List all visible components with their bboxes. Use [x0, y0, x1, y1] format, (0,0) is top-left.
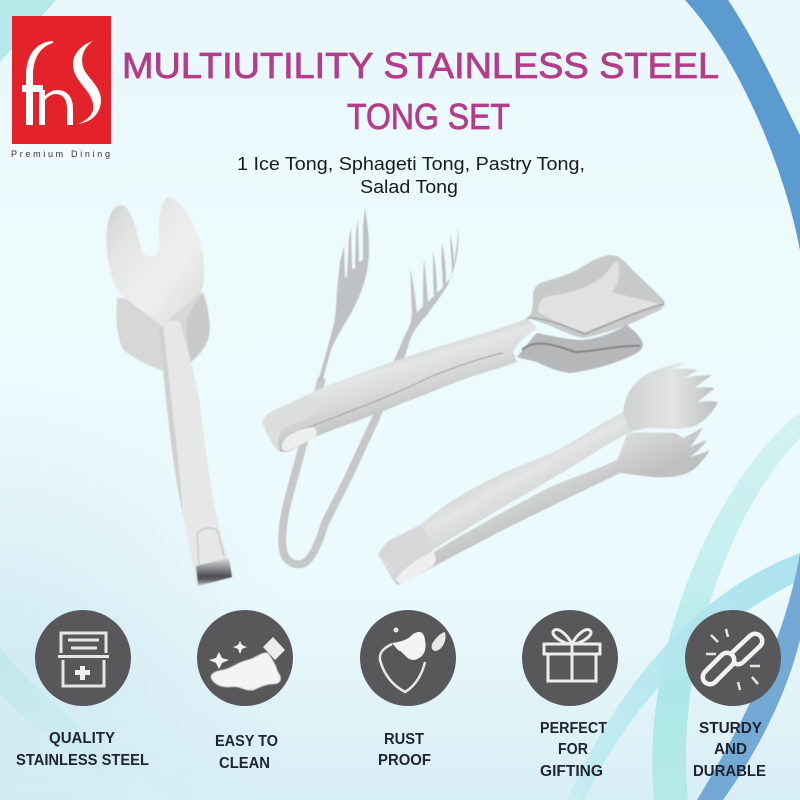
subtitle — [237, 153, 585, 197]
ribbon: top-left teal corner — [0, 0, 56, 62]
logo letter S — [73, 41, 101, 124]
logo letter n — [39, 90, 73, 125]
feature label: gifting: GIFTING — [540, 763, 603, 780]
ribbon: bottom-left pale teal arc — [0, 648, 173, 800]
back blade shadow — [187, 295, 209, 362]
front blade with notch — [106, 197, 204, 326]
label: EASY TO — [215, 733, 278, 750]
feature: rust proof — [360, 610, 456, 748]
icon: cooler box — [35, 610, 131, 706]
label: PERFECT — [540, 720, 608, 737]
icon: chain link — [685, 610, 781, 706]
hinge lobe — [282, 427, 317, 451]
handle end cap — [196, 558, 232, 586]
handle — [262, 318, 537, 452]
feature label: clean: CLEAN — [219, 755, 270, 772]
feature label: durable: DURABLE — [693, 763, 766, 780]
back blade — [116, 292, 210, 371]
fork head one — [318, 208, 369, 382]
handle — [158, 320, 232, 586]
product: pasta tong — [282, 208, 459, 564]
ribbon: light blue arc — [567, 553, 800, 800]
ribbon: bottom-right blue arc — [697, 553, 800, 800]
title: MULTIUTILITY STAINLESS STEEL — [122, 45, 719, 86]
fork head two — [393, 227, 459, 363]
upper blade crease — [527, 304, 664, 334]
arm and bottom loop — [282, 362, 398, 564]
upper head shading — [623, 363, 718, 432]
subtitle: 1 Ice Tong, Sphageti Tong, Pastry Tong, — [237, 153, 585, 174]
logo red square — [12, 16, 111, 144]
hinge cap — [262, 396, 320, 451]
label: QUALITY — [49, 730, 115, 747]
subtitle: Salad Tong — [360, 176, 458, 197]
ribbon: right teal arc — [652, 412, 800, 800]
feature label: for: FOR — [558, 741, 588, 758]
feature label: and: AND — [714, 741, 747, 758]
ribbon: top-right blue arc — [685, 0, 800, 250]
logo tagline: Premium Dining — [11, 149, 110, 159]
title — [122, 45, 719, 137]
label: RUST — [384, 731, 425, 748]
logo: FNS Premium Dining — [11, 16, 112, 160]
upper arm and head — [378, 363, 718, 583]
upper blade light panel — [538, 262, 660, 332]
hinge cap — [378, 525, 429, 566]
handle seam — [292, 353, 503, 434]
logo letter f — [22, 41, 53, 125]
label: STURDY — [699, 720, 762, 737]
product: spork tong — [378, 363, 718, 585]
product: salad tong — [106, 197, 232, 586]
hinge lobe — [396, 552, 436, 585]
icon: shield with drops — [360, 610, 456, 706]
title: TONG SET — [347, 96, 510, 137]
icon: spill and sparkles — [197, 610, 293, 706]
icon: gift box — [522, 610, 618, 706]
feature: sturdy and durable — [685, 610, 781, 737]
feature label: proof: PROOF — [378, 752, 431, 769]
lower blade dark seam — [522, 344, 640, 352]
upper blade — [527, 255, 665, 338]
product: ice tong — [262, 255, 665, 452]
feature: quality stainless steel — [35, 610, 131, 747]
lower blade — [517, 325, 643, 373]
feature label: stainless steel: STAINLESS STEEL — [16, 752, 149, 769]
feature: easy to clean — [197, 610, 293, 750]
lower arm and head — [393, 427, 710, 585]
handle shaded edge — [158, 325, 183, 515]
feature: perfect for gifting — [522, 610, 618, 737]
